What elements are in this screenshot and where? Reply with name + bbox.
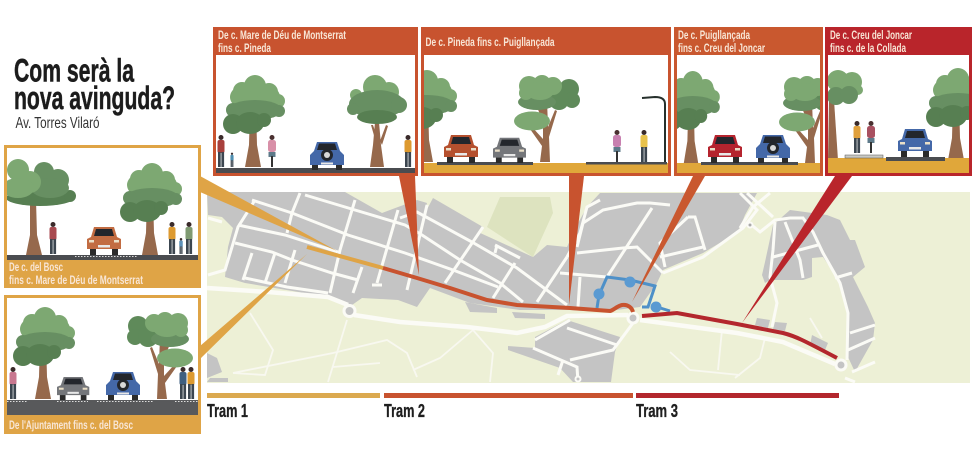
panel: De l'Ajuntament fins c. del Bosc: De l'Ajuntament fins c. del Bosc bbox=[9, 418, 133, 432]
panel: De c. Puigllançada fins c. Creu del Joncar: fins c. Creu del Joncar bbox=[678, 41, 765, 55]
main road bbox=[207, 288, 835, 364]
panel: De c. Mare de Déu de Montserrat: De c. Mare de Déu de Montserrat bbox=[218, 28, 346, 42]
title: nova avinguda? bbox=[14, 80, 175, 116]
panel: De c. Pineda fins c. Puigllançada bbox=[395, 27, 671, 176]
streets bbox=[208, 193, 875, 382]
panel: De c. del Bosc fins c. Mare de Déu de Montserrat: De c. del Bosc bbox=[9, 260, 63, 274]
icon: street lamp bbox=[642, 97, 665, 162]
title bbox=[14, 52, 175, 116]
panel: De c. Pineda fins c. Puigllançada: De c. Pineda fins c. Puigllançada bbox=[426, 35, 555, 49]
legend: Tram 3 bbox=[636, 393, 839, 421]
route line: tram 1 bbox=[307, 247, 383, 268]
panel: De c. del Bosc fins c. Mare de Déu de Montserrat: fins c. Mare de Déu de Montserrat bbox=[9, 273, 143, 287]
route line: tram 3 bbox=[642, 313, 837, 358]
panel: De c. Mare de Déu de Montserrat bbox=[213, 27, 418, 176]
subtitle: Av. Torres Vilaró bbox=[16, 115, 100, 132]
panel: De c. Mare de Déu de Montserrat: fins c. Pineda bbox=[218, 41, 271, 55]
panel: De l'Ajuntament fins c. del Bosc bbox=[4, 295, 201, 434]
panel: De c. Creu del Joncar fins c. de la Collada: De c. Creu del Joncar bbox=[830, 28, 912, 42]
panel: De c. del Bosc fins c. Mare de Déu de Montserrat bbox=[2, 145, 201, 288]
bike route bbox=[594, 276, 670, 312]
legend: Tram 3: Tram 3 bbox=[636, 401, 678, 421]
legend: Tram 1 bbox=[207, 393, 380, 421]
map bbox=[207, 192, 970, 383]
legend: Tram 2: Tram 2 bbox=[384, 401, 425, 421]
legend: Tram 2 bbox=[384, 393, 633, 421]
title: Com serà la bbox=[14, 52, 134, 88]
panel: De c. Puigllançada fins c. Creu del Joncar bbox=[674, 27, 823, 176]
panel: De c. Creu del Joncar fins c. de la Collada bbox=[825, 27, 980, 176]
callout wedges bbox=[200, 176, 852, 359]
legend: Tram 1: Tram 1 bbox=[207, 401, 248, 421]
route line: tram 2 bbox=[383, 268, 633, 312]
panel: De c. Creu del Joncar fins c. de la Collada: fins c. de la Collada bbox=[830, 41, 906, 55]
panel: De c. Puigllançada fins c. Creu del Joncar: De c. Puigllançada bbox=[678, 28, 750, 42]
